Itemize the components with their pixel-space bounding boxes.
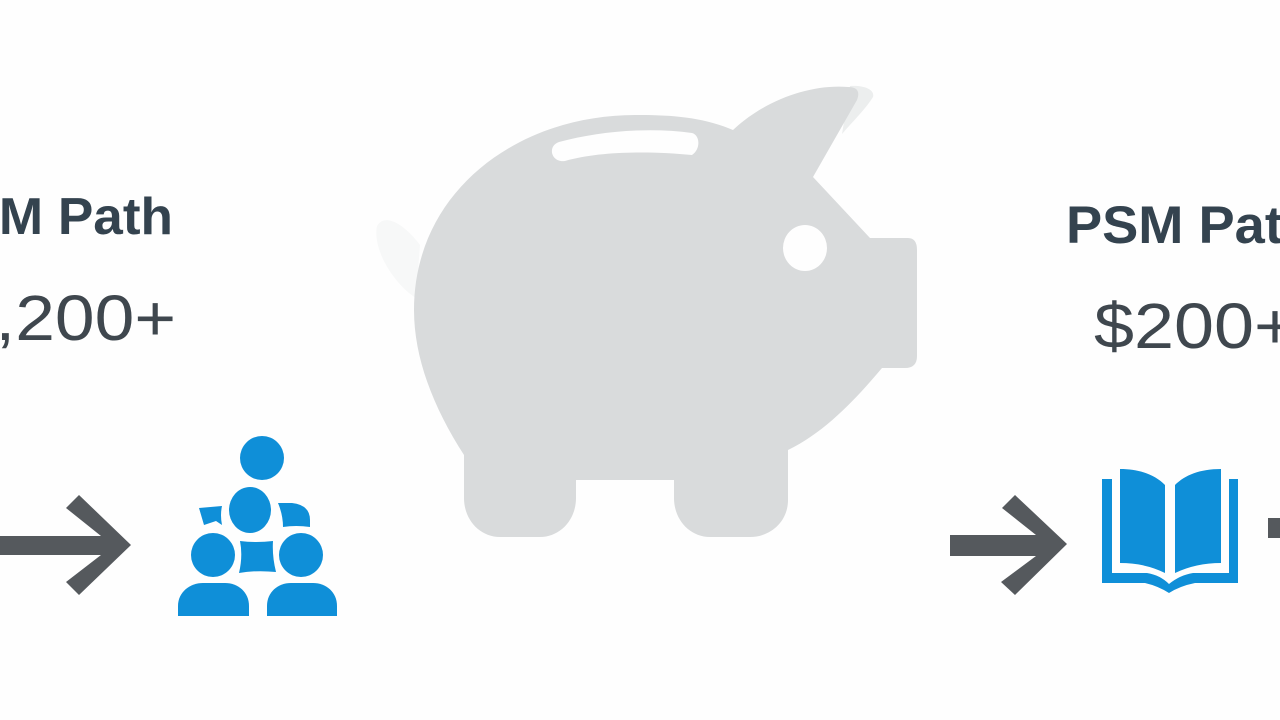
icon: group of people (178, 436, 337, 616)
pig tail shadow (376, 220, 420, 298)
panel: right path (950, 196, 1280, 595)
icon: piggy bank (376, 86, 917, 537)
pig ear shadow (842, 86, 873, 134)
arrow: right edge fragment (1268, 518, 1280, 538)
arrow: right path (950, 495, 1067, 595)
panel: left path (0, 188, 337, 616)
arrow: left path (0, 495, 131, 595)
pig body (414, 87, 917, 537)
icon: open book (1102, 469, 1238, 593)
cost: right path: $200+ (1094, 290, 1280, 362)
